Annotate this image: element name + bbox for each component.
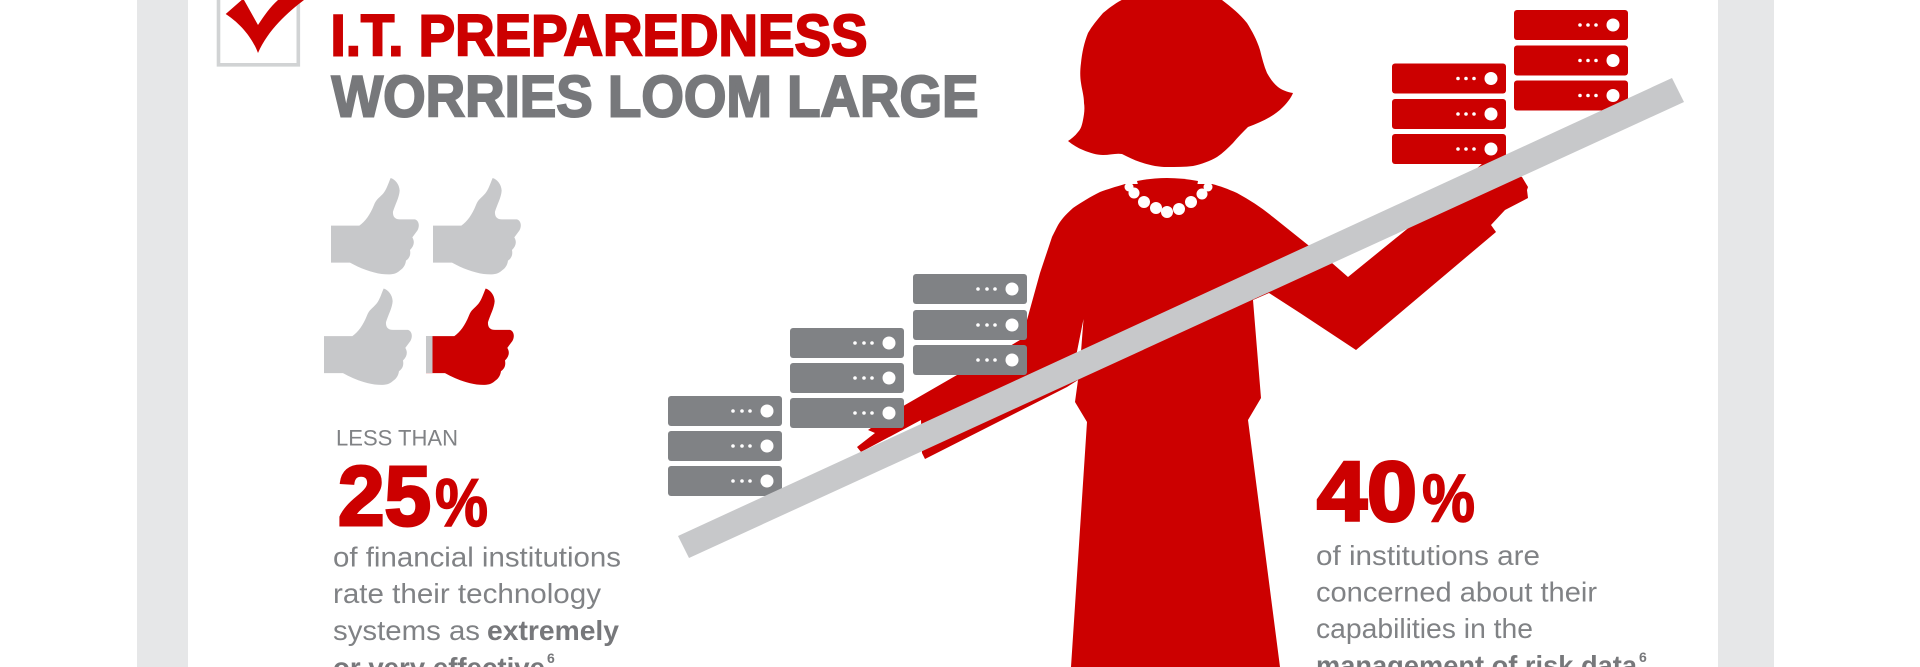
slit between arm and body <box>1076 319 1084 354</box>
stat: 40%: % <box>1422 460 1475 536</box>
text block: less than 25% <box>333 426 621 667</box>
text block: 40%: concerned about their <box>1316 576 1597 608</box>
panel: left side band <box>137 0 188 667</box>
text block: 40% <box>1316 444 1647 667</box>
icon: grey thumb 3 <box>324 288 412 385</box>
icon: red server stack upper <box>1392 10 1628 164</box>
stat: 25%: % <box>435 465 488 541</box>
icon: red thumb <box>426 288 514 385</box>
body, skirt and arms <box>857 163 1528 667</box>
text block: less than 25%: of financial institutions <box>333 542 621 572</box>
illustration: woman in red dress <box>857 0 1528 667</box>
title: I.T. PREPAREDNESS <box>330 4 868 68</box>
icon: checkbox with check mark <box>218 0 304 65</box>
icon group: four thumbs, one highlighted <box>324 178 521 385</box>
text block: less than 25%: rate their technology <box>333 578 601 609</box>
text block: less than 25%: extremely <box>487 615 619 646</box>
neck piece <box>1137 178 1198 192</box>
text block: less than 25%: 6 <box>547 650 555 666</box>
stat: 25%: 25 <box>338 449 431 543</box>
diagonal grey beam <box>678 78 1684 558</box>
text block: 40%: of institutions are <box>1316 540 1540 571</box>
text block: less than 25%: systems as <box>333 615 480 646</box>
pearl necklace <box>1124 182 1212 218</box>
icon: grey thumb 2 <box>433 178 521 274</box>
icon: grey thumb 1 <box>331 178 419 274</box>
text block: 40%: capabilities in the <box>1316 613 1533 644</box>
icon: grey server stacks <box>668 274 1027 496</box>
text block: less than 25%: LESS THAN <box>336 426 458 450</box>
stat: 40% <box>1317 444 1475 538</box>
text block: 40%: 6 <box>1639 649 1647 665</box>
hair and head <box>1068 0 1293 167</box>
panel: right side band <box>1718 0 1774 667</box>
title: WORRIES LOOM LARGE <box>332 64 978 130</box>
stat: 25% <box>338 449 488 543</box>
title <box>330 4 978 130</box>
stat: 40%: 40 <box>1317 444 1417 538</box>
